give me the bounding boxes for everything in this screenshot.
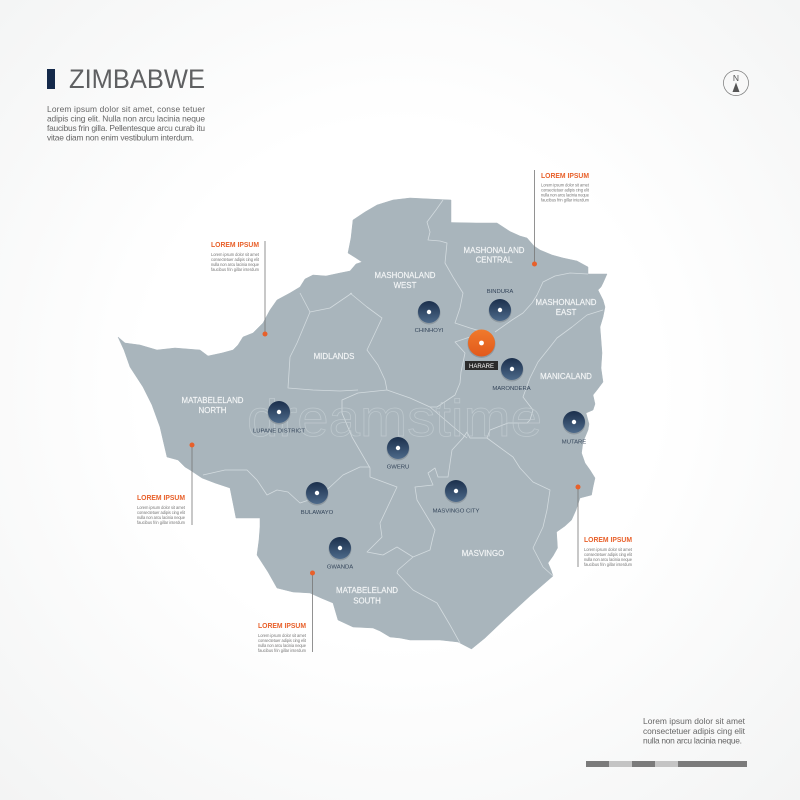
city pin: Bulawayo — [301, 482, 334, 516]
title: ZIMBABWE — [69, 64, 205, 94]
footer text: Lorem ipsum dolor sit amet — [643, 716, 746, 726]
city pin: Lupane District: LUPANE DISTRICT — [253, 428, 305, 434]
footer text — [643, 716, 746, 746]
callout: west: consectetuer adipis cing elit — [137, 510, 186, 515]
intro text: Lorem ipsum dolor sit amet, conse tetuer — [47, 104, 205, 114]
callout: west: Lorem ipsum dolor sit amet — [137, 505, 186, 510]
callout: south: faucibus frin gillar interdum — [258, 648, 307, 653]
city pin: Lupane District — [253, 401, 305, 434]
callout: north west — [211, 240, 268, 336]
city pin: Chinhoyi — [415, 301, 444, 334]
callout: south east — [576, 484, 633, 567]
city pin: Bulawayo: BULAWAYO — [301, 510, 334, 516]
city pin: Gwanda: GWANDA — [327, 564, 353, 570]
region labels: MASHONALAND — [464, 246, 525, 255]
intro text: adipis cing elit. Nulla non arcu lacinia neque — [47, 114, 205, 124]
region labels: MASVINGO — [462, 549, 504, 558]
callout: north east: consectetuer adipis cing elit — [541, 188, 590, 192]
city pin: Gwanda — [327, 537, 353, 570]
callout: south east: Lorem ipsum dolor sit amet — [584, 547, 633, 552]
region labels: WEST — [394, 281, 417, 290]
callout: south: LOREM IPSUM — [258, 621, 306, 630]
callout: north west: LOREM IPSUM — [211, 240, 259, 249]
city pin: Chinhoyi: CHINHOYI — [415, 328, 444, 334]
city pin: Marondera — [492, 358, 531, 392]
city pin: Bindura: BINDURA — [487, 289, 513, 295]
region borders — [203, 200, 603, 643]
region labels: MANICALAND — [540, 372, 592, 381]
callout: south: consectetuer adipis cing elit — [258, 638, 307, 643]
icon: compass: N — [733, 73, 739, 83]
callout: north east: faucibus frin gillar interdum — [541, 198, 590, 202]
region labels: EAST — [556, 308, 576, 317]
callout: north east: LOREM IPSUM — [541, 171, 589, 180]
capital pin: Harare — [465, 330, 498, 370]
footer text: consectetuer adipis cing elit — [643, 726, 746, 736]
callout: north west: nulla non arcu lacinia neque — [211, 262, 260, 267]
callout: west: nulla non arcu lacinia neque — [137, 515, 186, 520]
callout: south: Lorem ipsum dolor sit amet — [258, 633, 307, 638]
callout: south east: faucibus frin gillar interdum — [584, 562, 633, 567]
region labels: MASHONALAND — [375, 271, 436, 280]
callout: west — [137, 442, 194, 525]
region labels: MATABELELAND — [182, 396, 244, 405]
callout: north east: Lorem ipsum dolor sit amet — [541, 182, 590, 188]
callout: north west: Lorem ipsum dolor sit amet — [211, 252, 260, 257]
watermark: dreamstime — [247, 390, 542, 448]
city pin: Bindura — [487, 289, 513, 322]
city pin: Gweru: GWERU — [387, 464, 409, 470]
callout: north west: consectetuer adipis cing elit — [211, 257, 260, 262]
callout: south east: consectetuer adipis cing elit — [584, 552, 633, 557]
region labels: CENTRAL — [476, 256, 513, 264]
map of Zimbabwe — [118, 198, 607, 649]
intro text: faucibus frin gilla. Pellentesque arcu curab itu — [47, 123, 205, 133]
region labels: NORTH — [199, 406, 227, 415]
intro text — [47, 104, 205, 142]
city pin: Gweru — [386, 437, 410, 470]
region labels: MATABELELAND — [336, 586, 398, 595]
callout: south east: LOREM IPSUM — [584, 535, 632, 544]
city pin: Masvingo City: MASVINGO CITY — [433, 508, 479, 514]
title accent bar — [47, 69, 55, 89]
region labels: SOUTH — [353, 596, 381, 606]
callout: south: nulla non arcu lacinia neque — [258, 643, 307, 648]
region labels: MIDLANDS — [314, 352, 354, 361]
region labels: MASHONALAND — [536, 298, 597, 307]
callout: north east — [532, 170, 590, 266]
city pin: Marondera: MARONDERA — [492, 386, 531, 392]
country shape — [118, 198, 607, 649]
callout: west: faucibus frin gillar interdum — [137, 520, 186, 525]
city pin: Masvingo City — [433, 480, 479, 514]
callout: south east: nulla non arcu lacinia neque — [584, 557, 633, 562]
city pin: Mutare — [562, 411, 586, 446]
region labels — [182, 246, 597, 606]
scale bar — [586, 761, 747, 767]
city pin: Mutare: MUTARE — [562, 440, 586, 446]
callout: north west: faucibus frin gillar interdum — [211, 267, 260, 272]
intro text: vitae diam non enim vestibulum interdum. — [47, 132, 194, 142]
icon: compass — [724, 70, 748, 96]
callout: west: LOREM IPSUM — [137, 493, 185, 502]
callout: north east: nulla non arcu lacinia neque — [541, 192, 590, 198]
callout: south — [258, 570, 315, 653]
footer text: nulla non arcu lacinia neque. — [643, 736, 742, 746]
capital pin: Harare: HARARE — [469, 364, 494, 370]
